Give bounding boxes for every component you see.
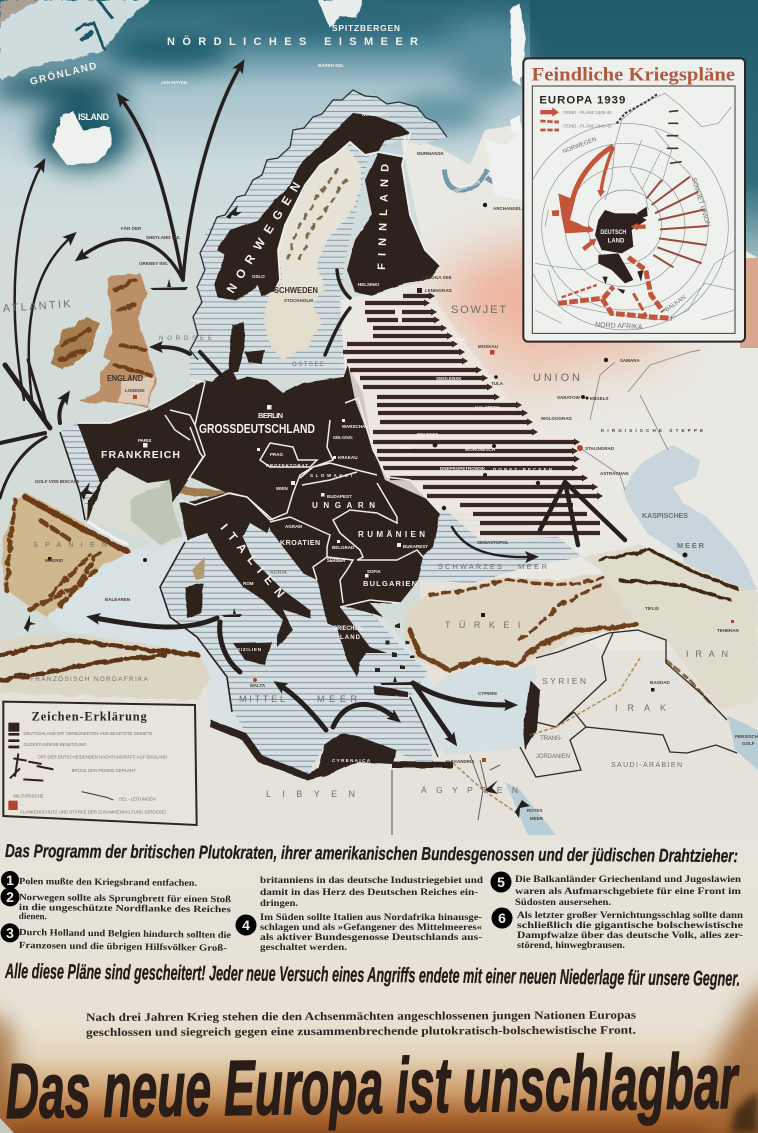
map labels: JAN MAYEN	[161, 80, 187, 85]
map labels: KIEW	[400, 445, 413, 450]
map labels: LIBYEN	[266, 789, 355, 799]
map labels: GRIECHEN	[333, 626, 362, 632]
map background	[0, 0, 758, 840]
map labels: ENGELS	[590, 396, 609, 401]
Low Countries	[148, 380, 212, 438]
map labels: HELSINKI	[358, 282, 379, 287]
inset map labels: SOWJET UNION	[690, 177, 711, 228]
map labels: LAND	[340, 635, 361, 641]
inset northern coast	[617, 93, 658, 123]
Egyptian coast strip	[392, 761, 453, 768]
map labels: MEER	[317, 694, 358, 704]
number 2 point: Norwegen sollte als Sprungbrett für einen Stoß	[19, 893, 231, 905]
inset map labels: BALKAN	[664, 295, 687, 313]
legend descriptions: DEUTSCHLAND MIT VERBÜNDETEN UND BESETZTE GEBIETE	[23, 731, 153, 736]
map labels: IRAK	[615, 703, 666, 713]
inset dashed southern attacks	[558, 257, 672, 318]
map labels: FRANKREICH	[101, 449, 180, 461]
Ukraine occupied ground	[345, 292, 605, 540]
map labels: GOLF VON BISCAYA	[35, 479, 80, 484]
inset map	[522, 93, 735, 331]
legend swatch occupied	[8, 723, 19, 732]
number 5 point: Südosten ausersehen.	[515, 898, 611, 908]
Greenland	[0, 0, 150, 80]
map labels: FÄR ÖER	[121, 225, 142, 231]
map labels: LONDON	[125, 388, 144, 393]
Ireland	[50, 317, 100, 370]
arrows Caucasus	[540, 482, 625, 545]
map labels: OSLO	[252, 274, 265, 279]
map labels: SARATOW	[557, 395, 581, 400]
map labels: ARCHANGELSK	[493, 206, 529, 211]
map labels: SOFIA	[367, 569, 382, 574]
terrain lands	[0, 145, 758, 710]
ship Mediterranean	[222, 608, 242, 617]
inset map frame	[532, 86, 735, 333]
map labels: NORWEGEN	[224, 180, 303, 296]
Turkey	[405, 573, 638, 673]
inset eastern attack lines	[647, 177, 708, 267]
arrow west Mediterranean	[95, 618, 217, 627]
closing paragraph	[86, 1010, 637, 1039]
Mediterranean hatched zone	[160, 520, 435, 775]
city markers	[143, 405, 401, 578]
map labels: JORDANIEN	[536, 753, 570, 760]
Black Sea	[418, 507, 582, 583]
legend descriptions: OEL - LEITUNGEN	[118, 797, 155, 802]
Mediterranean sea	[48, 524, 440, 752]
map labels: SEWASTOPOL	[477, 540, 509, 545]
map labels: TIFLIS	[645, 606, 659, 611]
Sardinia	[185, 583, 203, 618]
map labels: GRÖNLAND	[29, 59, 98, 88]
map labels: MALTA	[250, 683, 266, 688]
map labels: ASTRACHAN	[600, 471, 628, 476]
map labels: BALEAREN	[105, 597, 130, 602]
map labels: SERBIEN	[327, 558, 345, 564]
map labels: BAGDAD	[650, 680, 670, 685]
northern hatched zone	[190, 90, 447, 375]
inset title: Feindliche Kriegspläne	[532, 65, 735, 86]
map labels: SAUDI-ARABIEN	[611, 762, 682, 769]
legend panel: Zeichen-Erklärung	[3, 702, 197, 825]
legend descriptions: ORT DER ENTSCHEIDENDEN NACHTANGRIFFE AUF ENGLAND	[37, 754, 167, 759]
Southern Sweden	[262, 288, 325, 360]
map labels: KROATIEN	[280, 540, 320, 547]
map labels: SMOLENSK	[436, 376, 462, 381]
map labels: PROTEKTORAT	[266, 463, 308, 468]
Spitsbergen	[318, 0, 362, 28]
arrow to Syria	[413, 683, 509, 705]
map labels: MURMANSK	[417, 151, 444, 156]
number 3 point: Durch Holland und Belgien hindurch sollten die	[19, 928, 231, 941]
map labels: UNION	[533, 372, 580, 384]
map labels: GROSSDEUTSCHLAND	[199, 422, 315, 436]
national borders	[77, 133, 440, 607]
number 5 point: Die Balkanländer Griechenland und Jugoslawien	[515, 875, 742, 885]
map labels: ENGLAND	[107, 374, 143, 383]
Finland	[347, 133, 440, 295]
map labels: IRAN	[686, 649, 728, 659]
Grossdeutschland	[187, 365, 440, 677]
inset Deutschland label	[600, 230, 626, 244]
arrow Crete curve	[333, 704, 394, 727]
number 1 point: 1	[6, 872, 14, 888]
ships and planes	[24, 205, 530, 818]
map labels: ALEXANDRIA	[445, 759, 475, 764]
legend descriptions: BRÜCK DER FEINDE GEPLANT	[72, 768, 136, 773]
advance stripes across Russia	[343, 296, 600, 533]
map labels: ÄGYPTEN	[421, 785, 518, 795]
map labels: SPITZBERGEN	[332, 23, 400, 33]
mountain strokes	[0, 170, 740, 705]
map labels: LADOGA SEE	[422, 275, 452, 280]
inset Deutschland label: DEUTSCH	[600, 230, 626, 236]
Iceland	[53, 110, 112, 165]
Syria, Iraq and Iran borders	[392, 630, 737, 835]
inset legend heading: EUROPA 1939	[539, 94, 625, 106]
map labels: ITALIEN	[218, 521, 288, 600]
oil pipeline	[453, 658, 640, 815]
France occupied	[77, 410, 203, 523]
map labels: SAMARA	[620, 358, 640, 363]
arrow north fan	[183, 67, 240, 280]
map labels: BERLIN	[258, 411, 283, 420]
number 5 point	[490, 872, 742, 908]
number 5 point: 5	[497, 874, 505, 890]
map labels: WIEN	[276, 486, 288, 491]
map labels: ROM	[243, 581, 254, 586]
number 3 point: Franzosen und die übrigen Hilfsvölker Groß-	[19, 941, 227, 954]
legend descriptions: FLANKENSCHUTZ UND STÄRKE DER ZUSAMMENHALTUNG (GRÖSSE)	[20, 809, 166, 814]
map labels: ATLANTIK	[2, 298, 72, 315]
number 3 point: 3	[6, 925, 14, 941]
number 6 point: störend, hinwegbrausen.	[517, 941, 625, 951]
map labels: GEN.-GOUV.	[333, 435, 353, 440]
inset England	[558, 193, 593, 233]
number 4 point: schlagen und als »Gefangener des Mittelmeeres«	[260, 923, 482, 933]
text panel	[0, 835, 758, 1133]
Aegean islands	[375, 623, 414, 672]
map labels: LENINGRAD	[425, 288, 452, 293]
inset rings and coasts	[522, 93, 735, 330]
map labels: MEER	[530, 816, 544, 821]
inset Italy	[598, 253, 643, 294]
brown paper edges	[0, 975, 758, 1133]
map labels: BUKAREST	[403, 544, 428, 549]
Norway	[214, 113, 410, 300]
ship Crete	[380, 676, 414, 685]
map labels: BÄREN INS.	[318, 62, 344, 68]
number 4 point: Im Süden sollte Italien aus Nordafrika hinausge-	[260, 913, 482, 923]
map labels: FINNLAND	[376, 164, 392, 270]
number 2 point: 2	[6, 889, 14, 905]
number 6 point: Dampfwalze über das deutsche Volk, alles zer-	[517, 931, 743, 941]
Spain	[3, 493, 130, 617]
arrow to Egypt	[413, 683, 452, 739]
plane Norway	[226, 205, 242, 219]
Caspian Sea	[623, 445, 757, 590]
map labels: KALATSCH	[475, 405, 499, 410]
Denmark	[228, 322, 265, 372]
map labels: WORONESCH	[465, 447, 495, 452]
map labels: ROTES	[527, 808, 543, 813]
Italy	[180, 493, 310, 647]
map labels: ADRIA	[270, 570, 287, 576]
map labels: BELGRAD	[332, 545, 355, 550]
map labels: BUDAPEST	[327, 494, 352, 499]
map labels: CYRENAICA	[332, 758, 371, 763]
Caucasus and Persia	[582, 545, 758, 710]
map labels	[2, 23, 758, 821]
dark sea shading	[0, 4, 526, 169]
inset northern ticks	[667, 111, 682, 163]
map labels: SLOWAKEI	[310, 473, 352, 478]
number 3 point	[0, 923, 231, 954]
number 5 point: waren als Aufmarschgebiete für eine Front im	[515, 887, 741, 897]
legend descriptions: MILITÄRISCHE	[13, 794, 44, 799]
inset red arrow Sowjet	[636, 220, 646, 233]
arrow Tobruk to Tunis	[281, 686, 326, 730]
inset map labels	[562, 137, 711, 331]
legend descriptions: ZUGESTANDENE BESETZUNG	[23, 742, 87, 747]
ocean	[0, 0, 530, 240]
plane Egypt	[485, 780, 498, 794]
Sicily	[233, 642, 272, 665]
map labels: TULA	[491, 381, 504, 386]
map labels: NORDKAP	[362, 112, 385, 117]
plane Red Sea	[515, 800, 530, 818]
legend descriptions	[13, 731, 167, 814]
French North Africa	[0, 635, 210, 700]
map labels: NORDSEE	[159, 336, 212, 342]
inset legend keys: FEIND - PLÄNE 1941-42	[563, 123, 612, 128]
map labels: KIRGISISCHE STEPPE	[601, 428, 703, 433]
map labels: SYRIEN	[542, 676, 586, 686]
number 1 point	[1, 871, 197, 889]
Crimea	[470, 495, 530, 525]
number 2 point	[0, 887, 232, 924]
map labels: KRAKAU	[338, 455, 358, 460]
map labels: T Ü R K E I	[445, 620, 523, 630]
Nile	[470, 755, 500, 820]
map labels: KASPISCHES	[642, 511, 688, 520]
number 4 point: geschaltet werden.	[260, 943, 347, 953]
Cyrenaica bulge	[318, 733, 396, 777]
inset Germany	[595, 210, 647, 253]
map labels: RUMÄNIEN	[358, 530, 425, 539]
Palestine coast strip	[523, 680, 540, 750]
inset legend keys	[540, 107, 612, 130]
Libya coast	[210, 720, 322, 780]
map labels: SIZILIEN	[237, 647, 261, 652]
map labels: OSTSEE	[292, 362, 324, 368]
map labels: AGRAM	[285, 524, 302, 529]
number 6 point: 6	[498, 910, 506, 926]
arrow Nordsee	[158, 347, 190, 354]
map labels: WARSCHAU	[342, 424, 368, 429]
map labels: NÖRDLICHES EISMEER	[167, 35, 418, 48]
map labels: WOLGOGRAD	[541, 416, 572, 421]
arrows Biscay convergence	[5, 365, 50, 428]
arrow Black Sea	[452, 527, 530, 557]
Crete	[373, 685, 408, 697]
column two text: dringen.	[260, 899, 298, 909]
map labels: MADRID	[45, 558, 64, 563]
map labels: MEER	[518, 562, 548, 571]
map labels: UNGARN	[312, 501, 375, 510]
Sweden	[263, 145, 362, 358]
map labels: SPANIEN	[33, 542, 107, 549]
map labels: PRAG	[270, 452, 284, 457]
map labels: ISLAND	[78, 112, 110, 122]
closing paragraph: Nach drei Jahren Krieg stehen die den Achsenmächten angeschlossenen jungen Nationen Europas	[86, 1010, 637, 1024]
number 6 point: Als letzter großer Vernichtungsschlag sollte dann	[517, 911, 744, 921]
arrow Malta	[220, 622, 240, 672]
closing paragraph: geschlossen und siegreich gegen eine zusammenbrechende plutokratisch-bolschewistische Front.	[86, 1025, 636, 1039]
column two text: damit in das Herz des Deutschen Reiches ein-	[260, 888, 478, 898]
map labels: CYPERN	[478, 691, 497, 696]
map labels: POLTAWA	[417, 432, 439, 437]
map labels: SCHWEDEN	[274, 286, 318, 295]
map labels: TRANS-	[540, 735, 562, 742]
inset panel: Feindliche Kriegspläne	[522, 58, 745, 342]
column two text: britanniens in das deutsche Industriegebiet und	[260, 876, 484, 886]
number 4 point	[236, 913, 482, 953]
number 4 point: als aktiver Bundesgenosse Deutschlands aus-	[260, 933, 482, 943]
Kola and White Sea	[442, 168, 492, 192]
number 1 point: Polen mußte den Kriegsbrand entfachen.	[19, 877, 197, 889]
Britain	[80, 273, 157, 407]
map labels: GOLF	[742, 741, 755, 746]
Corsica	[192, 557, 205, 580]
inset legend keys: FEIND - PLÄNE 1939-40	[563, 110, 612, 115]
map labels: TEHERAN	[717, 628, 739, 633]
legend swatch red	[8, 801, 18, 810]
plane Biscay	[80, 482, 94, 500]
arrows Baltic	[337, 270, 350, 298]
map labels: STOCKHOLM	[284, 298, 313, 303]
inset map labels: NORD AFRIKA	[595, 322, 643, 331]
number 2 point: in die ungeschützte Nordflanke des Reiches	[19, 903, 231, 915]
map labels: ORKNEY INS.	[139, 261, 168, 266]
legend title: Zeichen-Erklärung	[32, 710, 147, 724]
attack arrows	[0, 67, 625, 739]
arctic lands	[0, 0, 526, 200]
western French coast outline	[60, 432, 85, 520]
inset Deutschland label: LAND	[608, 238, 625, 244]
map labels: BULGARIEN	[363, 579, 417, 588]
inset Scandinavia arrows	[572, 146, 613, 200]
column two text	[260, 876, 484, 909]
map labels: STALINGRAD	[585, 446, 615, 451]
map labels: SCHWARZES	[438, 562, 502, 571]
map labels: DONEZ-BECKEN	[493, 467, 552, 472]
map labels: MEER	[677, 541, 705, 550]
Russia land and pink tint	[340, 126, 758, 378]
map labels: SOWJET	[451, 304, 506, 316]
map labels: SHETLAND INS.	[146, 235, 181, 240]
map labels: KURSK	[450, 337, 467, 342]
Volga and rivers	[580, 350, 700, 490]
map labels: WEISSES MEER	[447, 179, 482, 196]
number 2 point: dienen.	[19, 912, 47, 922]
legend swatch stripes	[8, 734, 19, 747]
Biscay hatched zone	[60, 423, 100, 510]
plane Gibraltar	[24, 615, 36, 632]
map labels: PARIS	[138, 438, 151, 443]
map labels: DNEPROPETROWSK	[440, 466, 486, 471]
map labels: MITTEL	[239, 694, 285, 704]
number 6 point: schließlich die gigantische bolschewistische	[517, 921, 743, 931]
Persian Gulf and Red Sea	[505, 716, 758, 840]
Novaya Zemlya	[510, 4, 526, 135]
number 6 point	[492, 908, 744, 951]
map labels: FRANZÖSISCH NORDAFRIKA	[30, 675, 149, 683]
arrow Atlantic	[15, 166, 41, 400]
occupied territories	[77, 113, 540, 780]
blockade line north	[190, 90, 447, 360]
legend symbol weapons	[10, 753, 53, 781]
inset map labels: NORWEGEN	[562, 137, 597, 155]
eastern Mediterranean	[412, 665, 536, 755]
ship North Sea	[150, 279, 188, 290]
Vichy France	[132, 522, 184, 547]
map labels: MOSKAU	[478, 344, 498, 349]
number 4 point: 4	[242, 917, 250, 933]
